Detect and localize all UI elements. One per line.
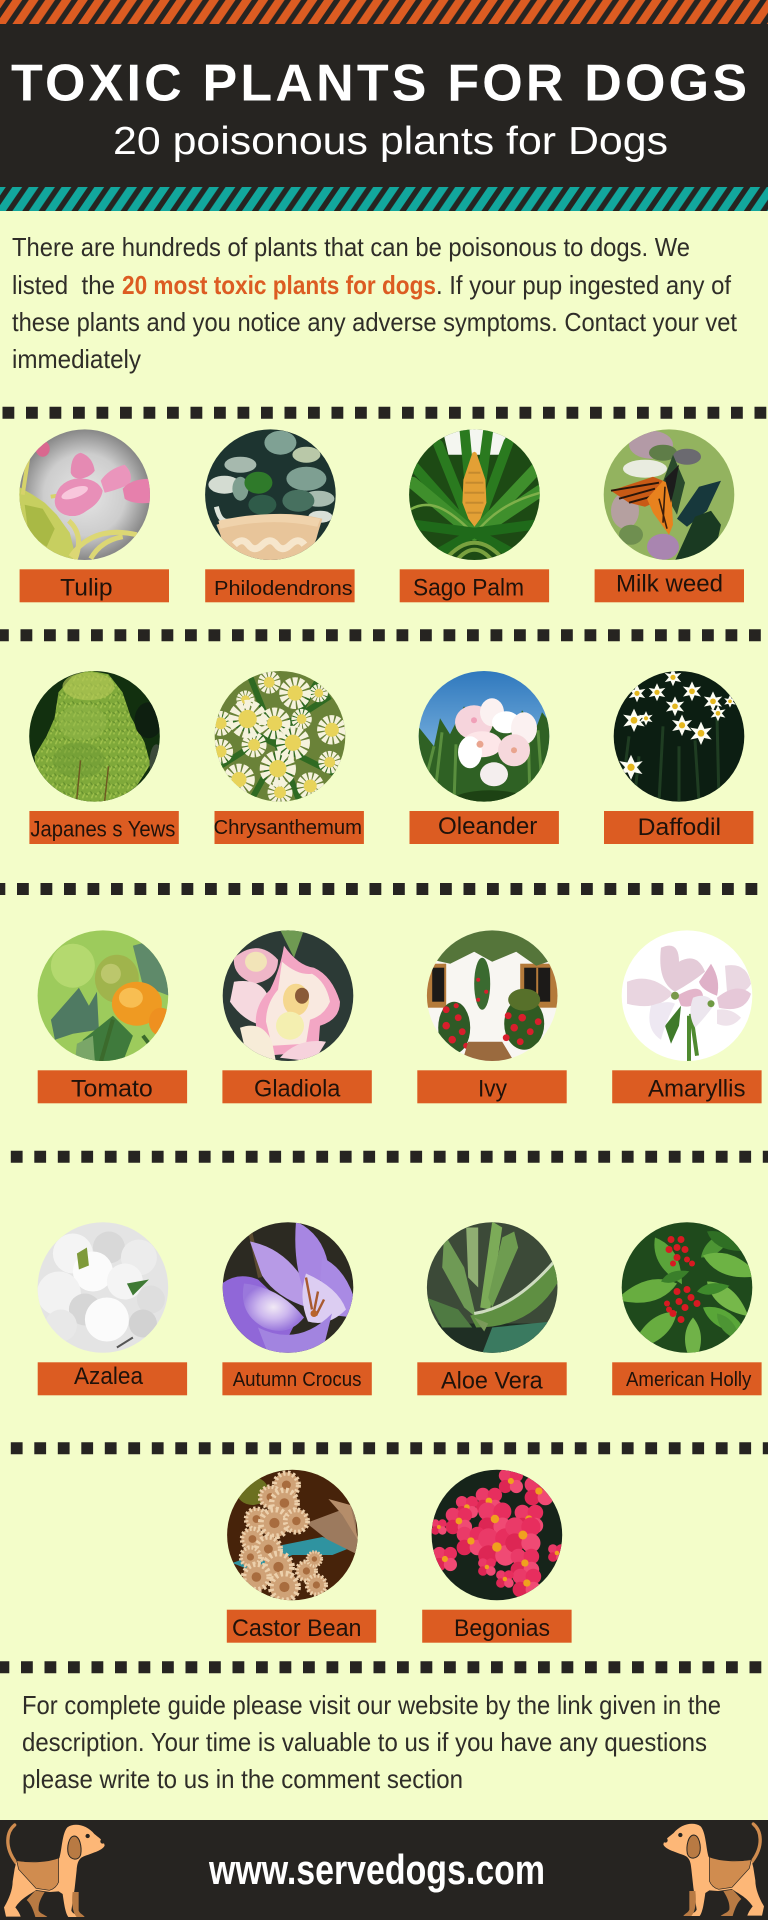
photo: castor bean <box>226 1469 358 1601</box>
photo: aloe vera <box>426 1222 558 1354</box>
label: Chrysanthemum <box>214 811 364 844</box>
closing text block: please write to us in the comment section <box>22 1764 463 1794</box>
photo: tulip <box>19 429 151 561</box>
plant: Chrysanthemum <box>212 670 364 844</box>
photo: ivy on wall <box>426 930 558 1062</box>
photo: begonias <box>431 1469 566 1601</box>
plant: Daffodil <box>604 668 753 844</box>
header banner <box>0 0 768 211</box>
intro text block <box>12 232 738 374</box>
intro text block: . If your pup ingested any of <box>436 270 732 300</box>
footer panel <box>0 1820 768 1920</box>
label: Chrysanthemum: Chrysanthemum <box>214 817 362 839</box>
plant: Gladiola <box>222 930 372 1103</box>
subtitle: 20 poisonous plants for Dogs <box>113 120 668 163</box>
intro text block: There are hundreds of plants that can be poisonous to dogs. We <box>12 232 690 262</box>
label: Amaryllis <box>612 1070 762 1103</box>
label: Amaryllis: Amaryllis <box>648 1076 746 1103</box>
plant: Milk weed <box>595 429 744 602</box>
intro text block: 20 most toxic plants for dogs <box>122 270 436 300</box>
plant: Autumn Crocus <box>222 1222 372 1395</box>
label: Oleander <box>410 811 559 844</box>
closing text block: description. Your time is valuable to us if you have any questions <box>22 1727 707 1757</box>
label: American Holly: American Holly <box>626 1369 751 1391</box>
plant: Amaryllis <box>612 930 762 1103</box>
photo: daffodil <box>613 668 745 802</box>
photo: sago palm <box>408 429 540 561</box>
label: Tulip <box>20 569 169 602</box>
intro text block: immediately <box>12 344 141 374</box>
label: Tomato: Tomato <box>71 1076 153 1103</box>
orange diagonal stripe band <box>0 0 768 24</box>
photo: american holly <box>622 1222 752 1353</box>
label: Castor Bean: Castor Bean <box>232 1615 362 1642</box>
label: Autumn Crocus: Autumn Crocus <box>233 1369 362 1391</box>
photo: azalea <box>37 1222 169 1354</box>
photo: amaryllis <box>621 930 753 1062</box>
label: Begonias: Begonias <box>454 1615 550 1642</box>
label: Azalea: Azalea <box>74 1363 144 1390</box>
dark title panel <box>0 24 768 187</box>
label: Oleander: Oleander <box>438 813 537 840</box>
plant: Sago Palm <box>400 429 549 602</box>
photo: tomato <box>37 930 173 1062</box>
plant: American Holly <box>612 1222 763 1395</box>
label: Sago Palm <box>400 569 549 602</box>
plant: Japanese Yews <box>28 670 179 844</box>
photo: milkweed with butterfly <box>603 429 735 561</box>
plant: Philodendrons <box>204 429 355 602</box>
label: Autumn Crocus <box>222 1362 372 1395</box>
label: Tomato <box>38 1070 187 1103</box>
plant: Begonias <box>422 1469 572 1643</box>
label: Tulip: Tulip <box>60 575 113 602</box>
title: TOXIC PLANTS FOR DOGS <box>11 54 747 112</box>
label: Daffodil <box>604 811 753 844</box>
photo: gladiola <box>222 930 354 1062</box>
plant: Castor Bean <box>226 1469 376 1643</box>
plant: Aloe Vera <box>417 1222 567 1395</box>
label: Gladiola: Gladiola <box>254 1076 341 1103</box>
plant: Oleander <box>410 670 559 844</box>
photo: philodendron <box>204 429 336 561</box>
label: Milk weed: Milk weed <box>616 571 723 598</box>
website url: www.servedogs.com <box>208 1846 545 1893</box>
label: Milk weed <box>595 569 744 602</box>
photo: chrysanthemum <box>212 670 346 802</box>
photo: oleander <box>418 670 550 814</box>
label: American Holly <box>612 1362 762 1395</box>
plant: Ivy <box>417 930 567 1103</box>
label: Ivy: Ivy <box>478 1076 507 1103</box>
closing text block <box>22 1690 721 1794</box>
label: Gladiola <box>222 1070 372 1103</box>
intro text block: listed the <box>12 270 115 300</box>
closing text block: For complete guide please visit our website by the link given in the <box>22 1690 721 1720</box>
label: Azalea <box>38 1362 187 1395</box>
icon: dog right <box>663 1824 764 1916</box>
plant: Tomato <box>37 930 187 1103</box>
label: Philodendrons: Philodendrons <box>214 578 353 600</box>
plant: Tulip <box>19 429 169 602</box>
footer banner <box>0 1820 768 1920</box>
icon: dog left <box>4 1825 105 1917</box>
label: Ivy <box>417 1070 567 1103</box>
label: Begonias <box>422 1610 572 1643</box>
label: Japanes s Yews: Japanes s Yews <box>30 817 175 842</box>
label: Philodendrons <box>205 569 355 602</box>
photo: autumn crocus <box>222 1222 354 1354</box>
plant: Azalea <box>37 1222 187 1395</box>
photo: yew <box>28 670 164 802</box>
teal diagonal stripe band <box>0 187 768 211</box>
label: Aloe Vera <box>417 1362 567 1395</box>
label: Aloe Vera: Aloe Vera <box>441 1367 543 1394</box>
label: Daffodil: Daffodil <box>638 814 721 841</box>
label: Sago Palm: Sago Palm <box>413 575 524 602</box>
